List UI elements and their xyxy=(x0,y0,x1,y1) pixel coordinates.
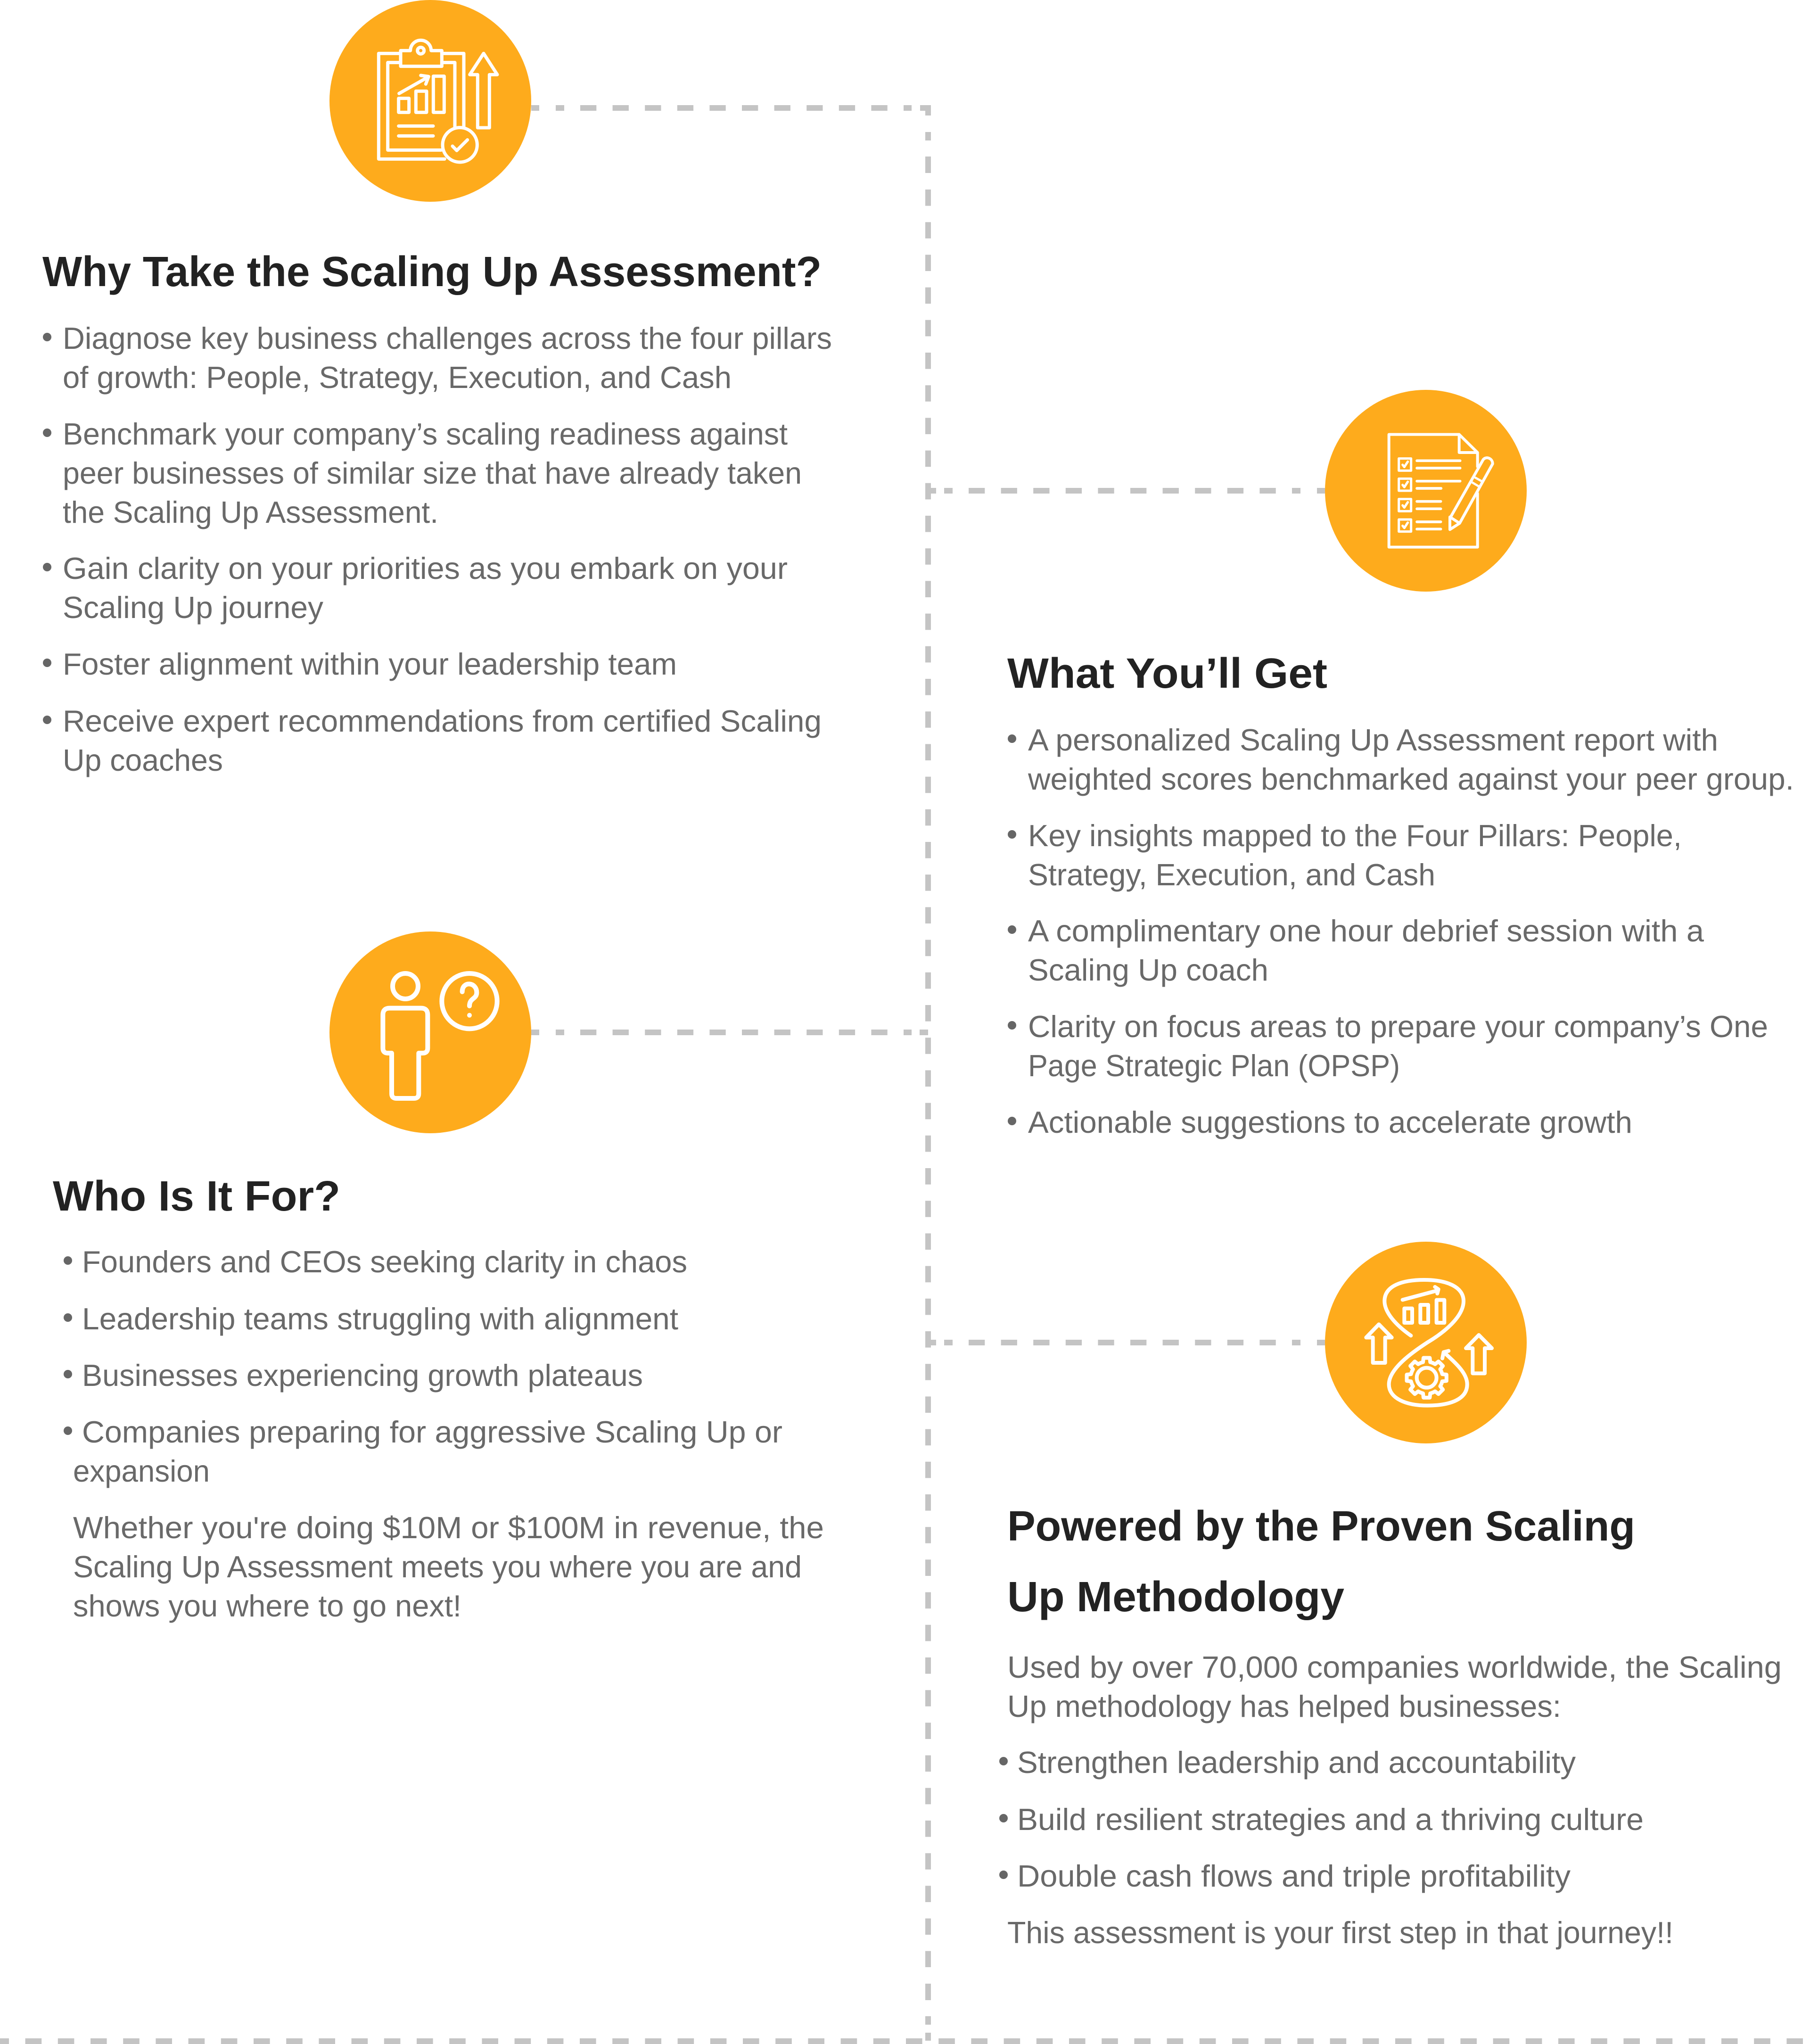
bullet list: reasons: Foster alignment within your leadership team xyxy=(63,647,677,681)
bullet list: deliverables: Page Strategic Plan (OPSP) xyxy=(1028,1048,1400,1083)
bullet list: outcomes: Build resilient strategies and a thriving culture xyxy=(1017,1802,1644,1837)
panel: why take the assessment xyxy=(42,248,832,777)
panel: who is it for xyxy=(53,1173,824,1623)
bullet list: audience: Leadership teams struggling with alignment xyxy=(82,1302,678,1336)
heading: powered by: Up Methodology xyxy=(1007,1574,1344,1621)
bullet list: reasons: of growth: People, Strategy, Execution, and Cash xyxy=(63,360,732,395)
closing paragraph: Scaling Up Assessment meets you where you are and xyxy=(73,1549,802,1584)
bullet list: audience: Businesses experiencing growth plateaus xyxy=(82,1358,643,1393)
heading: powered by: Powered by the Proven Scaling xyxy=(1007,1503,1635,1550)
bullet list: deliverables: Scaling Up coach xyxy=(1028,953,1268,987)
closing paragraph: shows you where to go next! xyxy=(73,1589,461,1623)
bullet list: outcomes: Double cash flows and triple profitability xyxy=(1017,1859,1571,1893)
intro paragraph xyxy=(1007,1650,1782,1723)
bullet list: deliverables xyxy=(1008,723,1794,1139)
bullet list: reasons xyxy=(43,321,832,777)
bullet list: outcomes xyxy=(999,1745,1644,1893)
closing paragraph xyxy=(73,1510,824,1623)
bullet list: reasons: Gain clarity on your priorities as you embark on your xyxy=(63,551,788,585)
bullet list: audience: Companies preparing for aggressive Scaling Up or xyxy=(82,1415,782,1449)
heading: powered by xyxy=(1007,1503,1635,1621)
bullet list: reasons: Scaling Up journey xyxy=(63,590,323,625)
icon: clipboard with chart and up arrow xyxy=(329,0,531,202)
bullet list: reasons: Receive expert recommendations from certified Scaling xyxy=(63,704,822,738)
intro paragraph: Used by over 70,000 companies worldwide, the Scaling xyxy=(1007,1650,1782,1684)
bullet list: deliverables: Key insights mapped to the Four Pillars: People, xyxy=(1028,818,1682,853)
bullet list: audience: expansion xyxy=(73,1454,210,1488)
closing paragraph: Whether you're doing $10M or $100M in revenue, the xyxy=(73,1510,824,1545)
closing line: This assessment is your first step in that journey!! xyxy=(1007,1915,1673,1950)
bullet list: reasons: Benchmark your company’s scaling readiness against xyxy=(63,417,788,451)
panel: powered by methodology xyxy=(999,1503,1782,1950)
bullet list: deliverables: Actionable suggestions to accelerate growth xyxy=(1028,1105,1632,1139)
heading: who is it for: Who Is It For? xyxy=(53,1173,340,1220)
heading: why take: Why Take the Scaling Up Assessment? xyxy=(42,248,822,296)
bullet list: deliverables: Clarity on focus areas to prepare your company’s One xyxy=(1028,1009,1768,1044)
bullet list: outcomes: Strengthen leadership and accountability xyxy=(1017,1745,1576,1780)
bullet list: deliverables: A complimentary one hour debrief session with a xyxy=(1028,914,1704,948)
icon: growth path with chart, gear and arrows xyxy=(1325,1242,1527,1443)
intro paragraph: Up methodology has helped businesses: xyxy=(1007,1689,1561,1723)
bullet list: audience xyxy=(64,1245,782,1488)
heading: what you'll get: What You’ll Get xyxy=(1007,650,1327,697)
bullet list: deliverables: A personalized Scaling Up Assessment report with xyxy=(1028,723,1718,757)
panel: what you'll get xyxy=(1007,650,1794,1139)
bullet list: audience: Founders and CEOs seeking clarity in chaos xyxy=(82,1245,687,1279)
icon: checklist document with pencil xyxy=(1325,390,1527,592)
bullet list: deliverables: Strategy, Execution, and Cash xyxy=(1028,857,1435,892)
bullet list: reasons: Up coaches xyxy=(63,743,223,777)
icon: person with question mark xyxy=(329,931,531,1133)
bullet list: reasons: Diagnose key business challenges across the four pillars xyxy=(63,321,832,355)
bullet list: deliverables: weighted scores benchmarked against your peer group. xyxy=(1028,762,1794,796)
bullet list: reasons: peer businesses of similar size that have already taken xyxy=(63,456,802,490)
bullet list: reasons: the Scaling Up Assessment. xyxy=(63,495,438,529)
